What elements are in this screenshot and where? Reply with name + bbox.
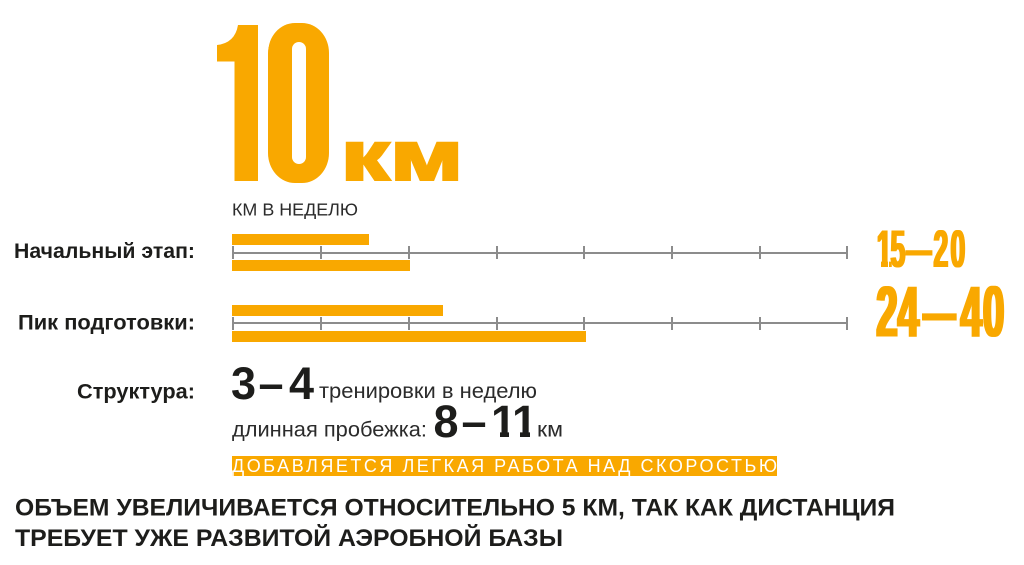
structure: long run: 8 <box>434 396 459 447</box>
structure: long run: км <box>537 418 563 442</box>
range value 15-20 <box>878 230 966 268</box>
structure: long run: 1 <box>491 396 516 447</box>
range value 15-20: 1 <box>877 219 892 278</box>
title: big number 10 km <box>217 23 458 183</box>
conclusion text: ОБЪЕМ УВЕЛИЧИВАЕТСЯ ОТНОСИТЕЛЬНО 5 КМ, ТАК КАК ДИСТАНЦИЯ <box>15 494 895 522</box>
range value 24-40: 4 <box>898 273 919 353</box>
range value 24-40 <box>876 272 1004 353</box>
row label: initial stage: Начальный этап: <box>14 240 195 263</box>
range value 15-20: 2 <box>934 219 948 278</box>
row label: structure: Структура: <box>77 380 195 404</box>
structure: sessions per week <box>231 358 537 409</box>
range value 15-20: — <box>906 220 932 279</box>
conclusion text: ТРЕБУЕТ УЖЕ РАЗВИТОЙ АЭРОБНОЙ БАЗЫ <box>15 524 563 552</box>
row label: peak preparation: Пик подготовки: <box>18 312 195 334</box>
structure: sessions per week: – <box>258 358 284 409</box>
structure: sessions per week: 4 <box>289 358 314 409</box>
structure: sessions per week: 3 <box>231 358 256 409</box>
bar chart: peak preparation <box>232 305 848 342</box>
range value 24-40: 2 <box>876 273 898 353</box>
unit km: км <box>341 114 463 197</box>
range value 24-40: 0 <box>983 273 1004 353</box>
subtitle: КМ В НЕДЕЛЮ <box>232 200 358 220</box>
range value 24-40: — <box>924 272 955 352</box>
structure: sessions per week: тренировки в неделю <box>319 379 537 403</box>
bar chart: initial stage <box>232 234 848 271</box>
structure: long run <box>232 405 562 441</box>
range value 15-20: 0 <box>950 219 965 278</box>
range value 24-40: 4 <box>961 273 982 353</box>
structure: long run: – <box>462 396 487 447</box>
highlighted note: ДОБАВЛЯЕТСЯ ЛЕГКАЯ РАБОТА НАД СКОРОСТЬЮ <box>232 456 777 476</box>
structure: long run: 1 <box>512 396 537 447</box>
range value 15-20: 5 <box>890 219 905 278</box>
structure: long run: длинная пробежка: <box>232 418 427 442</box>
conclusion text <box>15 494 895 552</box>
